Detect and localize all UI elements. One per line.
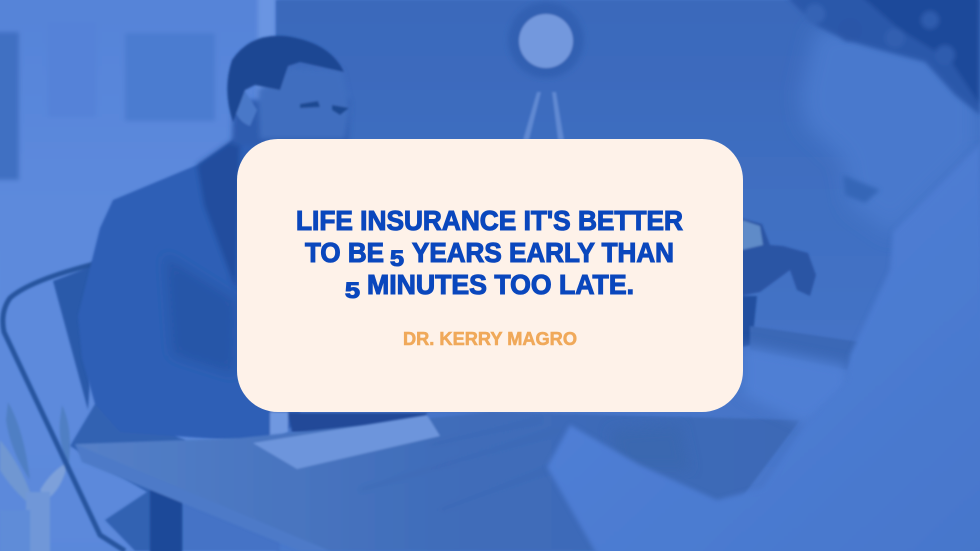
man: cuff and hand	[270, 412, 288, 443]
attribution: DR. KERRY MAGRO	[403, 328, 577, 349]
foreground man: hair	[785, 0, 980, 115]
quote text: 5	[345, 278, 360, 303]
wall mirror on tripod	[508, 2, 584, 140]
foreground man: far arm	[743, 345, 850, 425]
right plant and side table	[740, 218, 860, 370]
man: lower jacket	[70, 404, 185, 551]
seated man	[70, 36, 427, 551]
foreground man, out of focus	[547, 0, 980, 551]
foreground man: hands on table	[610, 425, 690, 470]
quote text	[296, 205, 683, 303]
man: jacket	[78, 140, 300, 443]
window area	[0, 0, 278, 551]
foreground man: face	[800, 10, 980, 235]
card background	[237, 139, 743, 412]
far plant bottom left	[0, 402, 70, 551]
man: hair	[227, 36, 344, 122]
quote text: 5	[390, 246, 404, 271]
quote text: YEARS EARLY THAN	[412, 237, 674, 268]
back wall	[276, 0, 980, 551]
chair	[3, 263, 125, 551]
quote card	[237, 139, 743, 412]
quote text: TO BE	[305, 237, 384, 268]
man: neck and face	[232, 100, 350, 145]
quote text: LIFE INSURANCE IT'S BETTER	[296, 205, 683, 236]
table with paper	[75, 412, 800, 551]
quote text: MINUTES TOO LATE.	[367, 269, 634, 300]
foreground man: shirt	[547, 144, 980, 551]
